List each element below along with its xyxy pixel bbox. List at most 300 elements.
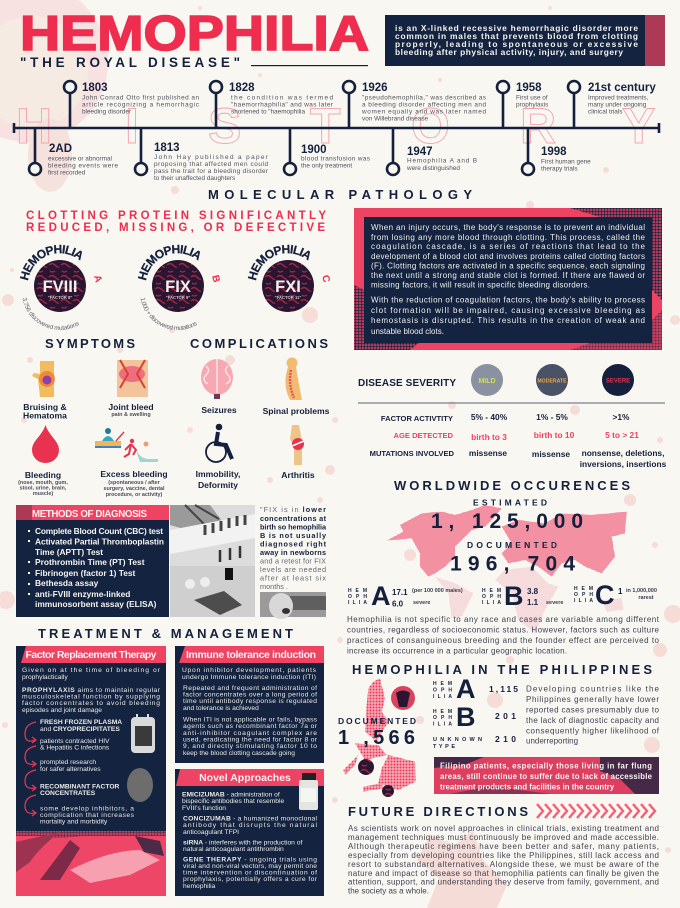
- callout: factor IX note: away in newborns: [260, 548, 326, 557]
- stat: PH hemophilia A: [433, 674, 518, 704]
- stat: hemophilia C: in 1,000,000: [626, 588, 657, 594]
- factor badge: hemophilia B: HEMOPHILIA: [138, 244, 200, 280]
- icon: wheelchair: [206, 424, 232, 462]
- event 1900: the only treatment: [301, 162, 352, 170]
- factor badge: hemophilia A: "FACTOR 8": [48, 295, 72, 300]
- stat: PH hemophilia A: A: [456, 674, 476, 704]
- event 1926: women equally and was later named: [361, 108, 486, 116]
- icon: vial: [299, 773, 318, 810]
- disease severity table: 5 to > 21: [605, 430, 639, 440]
- photo: baby: [260, 592, 326, 619]
- stat: hemophilia B: ILIA: [482, 600, 501, 606]
- text: future directions: [348, 824, 660, 896]
- panel: factor replacement therapy: and CRYOPRECIPITATES: [40, 726, 120, 733]
- event 1926: "pseudohemophilia," was described as: [362, 94, 486, 102]
- panel: novel approaches: Novel Approaches: [199, 772, 291, 784]
- panel: methods of diagnosis: Time (APTT) Test: [35, 547, 103, 557]
- panel: novel approaches: prophylaxis, potentially offers a cure for: [183, 876, 318, 883]
- stat: hemophilia A: ILIA: [348, 600, 367, 606]
- event 1926: a bleeding disorder affecting men and: [362, 102, 486, 108]
- stat: PH unknown type: [433, 734, 516, 750]
- stat: PH hemophilia B: 201: [495, 711, 516, 721]
- badge: severe: SEVERE: [606, 378, 630, 384]
- text: worldwide description: [347, 615, 660, 656]
- decorative chevrons: [537, 804, 655, 818]
- stat: hemophilia C: OPH: [574, 592, 593, 598]
- stat: documented: 196, 704: [450, 552, 575, 576]
- label: joint bleed: Joint bleed: [108, 402, 154, 412]
- panel: immune tolerance induction: Repeated and frequent administration of: [183, 685, 317, 692]
- history outline letters: S: [208, 98, 241, 154]
- event 1947: 1947: [407, 146, 433, 158]
- event 1926: 1926: [362, 82, 388, 94]
- panel: factor replacement therapy: for safer alternatives: [40, 766, 101, 773]
- stat: PH unknown type: UNKNOWN: [433, 737, 482, 743]
- panel: factor replacement therapy: RECOMBINANT FACTOR: [40, 784, 120, 790]
- label: immobility: Deformity: [198, 480, 238, 490]
- factor badge: hemophilia C: FXI: [275, 278, 301, 296]
- callout: factor IX note: levels are needed: [260, 565, 326, 574]
- intro box: bleeding after physical activity, injury, and surgery: [395, 47, 623, 57]
- stat: documented philippines: [338, 716, 416, 749]
- callout: filipino patients: Filipino patients, especially those living in far flung: [440, 762, 652, 770]
- photo: cryoprecipitate: [127, 768, 153, 802]
- stat: documented: DOCUMENTED: [467, 540, 557, 550]
- stat: PH hemophilia B: ILIA: [433, 722, 452, 728]
- label: bleeding: muscle): [33, 491, 53, 497]
- disease severity table: birth to 3: [471, 432, 507, 442]
- callout: factor IX note: "FIX is in lower: [260, 505, 326, 514]
- stat: hemophilia B: 3.8: [527, 587, 539, 596]
- stat: hemophilia B: HEM: [482, 588, 501, 594]
- disease severity table: nonsense, deletions,: [582, 448, 664, 458]
- event 1947: were distinguished: [406, 165, 460, 172]
- factor badge: hemophilia B: "FACTOR 9": [166, 295, 190, 300]
- factor badge: hemophilia A: [20, 244, 104, 330]
- text: worldwide description: Hemophilia is not specific to any race and cases are variable among different: [347, 615, 660, 624]
- event 21st century: [588, 82, 656, 116]
- icon: blood drop: [32, 425, 59, 463]
- disease severity table: AGE DETECTED: [394, 431, 454, 440]
- event 1828: shortened to "haemophilia: [231, 108, 305, 116]
- event 1926: von Willebrand disease: [362, 116, 429, 122]
- stat: hemophilia A: OPH: [348, 594, 367, 600]
- disease severity table: MUTATIONS INVOLVED: [370, 449, 455, 458]
- event 1803: John Conrad Otto first published an: [82, 94, 199, 102]
- panel: factor replacement therapy: CONCENTRATES: [40, 790, 96, 797]
- panel: factor replacement therapy: patients contracted HIV: [40, 738, 110, 745]
- stat: PH hemophilia A: OPH: [433, 688, 452, 694]
- label: spinal problems: Spinal problems: [263, 406, 330, 416]
- history outline letters: R: [520, 98, 556, 154]
- intro box: common in males that prevents blood from clotting: [395, 31, 638, 41]
- factor badge: hemophilia A: A: [91, 274, 104, 284]
- panel: novel approaches: FVIII's function: [182, 805, 226, 812]
- panel: novel approaches: siRNA - interferes with the production of: [183, 840, 302, 846]
- stat: PH hemophilia A: ILIA: [433, 694, 452, 700]
- label: joint bleed: pain & swelling: [111, 412, 151, 418]
- subtitle: "THE ROYAL DISEASE": [20, 55, 240, 70]
- panel: novel approaches: EMICIZUMAB - administration of: [182, 792, 280, 798]
- panel: immune tolerance induction: Immune tolerance induction: [186, 649, 316, 661]
- history outline letters: O: [411, 98, 450, 154]
- event 2AD: excessive or abnormal: [48, 156, 112, 162]
- event 1958: [516, 82, 548, 108]
- disease severity table: inversions, insertions: [580, 459, 667, 469]
- panel: novel approaches: CONCIZUMAB - a humanized monoclonal: [183, 816, 318, 822]
- map: philippines dotted: [343, 678, 416, 792]
- event 1813: to their unaffected daughters: [154, 175, 235, 182]
- panel: immune tolerance induction: anti-inhibitor coagulant complex are: [183, 730, 317, 737]
- panel: factor replacement therapy: factor concentrates to avoid bleeding: [22, 700, 160, 707]
- event 1813: [154, 142, 269, 182]
- event 1828: [229, 82, 334, 116]
- stat: hemophilia A: [348, 581, 463, 611]
- stat: PH hemophilia A: 1,115: [489, 684, 518, 694]
- history outline letters: Y: [622, 98, 655, 154]
- badge: moderate: MODERATE: [537, 378, 567, 384]
- heading: treatment and management: TREATMENT & MANAGEMENT: [38, 626, 293, 641]
- stat: hemophilia A: (per 100 000 males): [412, 588, 463, 594]
- stat: hemophilia A: 6.0: [392, 600, 404, 608]
- label: bleeding: (nose, mouth, gum,: [18, 480, 68, 486]
- label: bleeding: Bleeding: [25, 470, 61, 480]
- panel: immune tolerance induction: 9, and directly stimulating factor 10 to: [183, 743, 317, 750]
- panel: immune tolerance induction: used, eradicating the need for factor 8 or: [183, 736, 318, 744]
- stat: hemophilia B: [482, 581, 563, 611]
- callout: filipino patients: areas, still continue to suffer due to lack of accessible: [440, 772, 653, 781]
- factor badge: hemophilia C: "FACTOR 11": [275, 295, 301, 300]
- text: future directions: especially from developing countries like the Philippines, still lack access and: [348, 851, 659, 860]
- arrows: treatment flow: [25, 722, 36, 816]
- panel: coagulation explanation: unstable blood clots.: [371, 327, 444, 336]
- factor badge: hemophilia A: FVIII: [43, 278, 77, 296]
- icon: arthritis knee: [290, 425, 304, 465]
- disease severity table: missense: [469, 448, 507, 458]
- heading: molecular pathology: MOLECULAR PATHOLOGY: [208, 187, 472, 202]
- event 1813: pass the trait for a bleeding disorder: [154, 168, 269, 175]
- history outline letters: T: [310, 98, 341, 154]
- panel: methods of diagnosis: METHODS OF DIAGNOSIS: [32, 509, 148, 520]
- history outline letters: I: [125, 98, 139, 154]
- event 21st century: 21st century: [588, 82, 656, 94]
- timeline: [14, 81, 659, 182]
- text: philippines description: [526, 684, 660, 746]
- panel: factor replacement therapy: [16, 646, 166, 896]
- panel: coagulation explanation: clot formation will be impaired, causing excessive bleeding as: [371, 306, 645, 315]
- stat: PH hemophilia B: HEM: [433, 709, 452, 715]
- factor badge: hemophilia B: 1,000 + discovered mutations: [140, 298, 197, 330]
- panel: coagulation explanation: When an injury occurs, the body's response is to prevent an individual: [371, 223, 645, 232]
- intro box: [385, 15, 665, 66]
- heading: future directions: FUTURE DIRECTIONS: [348, 804, 528, 819]
- event 1947: [406, 146, 477, 172]
- panel: coagulation explanation: from losing any more blood through clotting. This process, called the: [371, 233, 646, 242]
- callout: filipino patients: treatment products and facilities in the country: [440, 782, 615, 792]
- panel: methods of diagnosis: [16, 505, 169, 617]
- callout: filipino patients: [434, 757, 659, 794]
- intro box: properly, leading to spontaneous or excessive: [395, 39, 638, 49]
- callout: factor IX note: concentrations at: [260, 514, 327, 523]
- factor badge: hemophilia C: HEMOPHILIA: [248, 244, 310, 280]
- text: philippines description: the lack of diagnostic capacity and: [526, 716, 659, 725]
- photo: laboratory: [170, 505, 255, 617]
- text: future directions: attention, support, and understanding they deserve from family, government, and: [348, 878, 659, 886]
- panel: immune tolerance induction: factor concentrates over a long period of: [183, 692, 317, 698]
- label: joint bleed: [108, 402, 154, 418]
- stat: hemophilia C: HEM: [574, 586, 593, 592]
- disease severity table: 1% - 5%: [536, 412, 568, 422]
- text: future directions: the society as a whole.: [348, 886, 429, 896]
- heading: hemophilia in the philippines: HEMOPHILIA IN THE PHILIPPINES: [352, 662, 652, 677]
- panel: novel approaches: natural anticoagulant antithrombin: [183, 846, 284, 853]
- panel: factor replacement therapy: Factor Replacement Therapy: [26, 649, 157, 661]
- event 2AD: first recorded: [48, 170, 86, 176]
- factor badge: hemophilia B: FIX: [165, 278, 191, 296]
- event 1813: John Hay published a paper: [154, 154, 269, 161]
- event 1998: 1998: [541, 146, 567, 158]
- heading: complications: COMPLICATIONS: [190, 336, 328, 351]
- panel: methods of diagnosis: immunosorbent assay (ELISA): [35, 599, 157, 609]
- event 1803: article recognizing a hemorrhagic: [82, 102, 200, 108]
- text: future directions: nature and impact of disease so that hemophilia patients can finally be given the: [348, 869, 660, 878]
- icon: brain: [201, 359, 233, 399]
- icon: bruised hand: [32, 361, 55, 397]
- stat: PH unknown type: 210: [495, 734, 516, 744]
- panel: methods of diagnosis: Fibrinogen (factor 1) Test: [35, 568, 136, 578]
- panel: methods of diagnosis: Bethesda assay: [35, 578, 99, 588]
- panel: novel approaches: GENE THERAPY - ongoing trials using: [183, 856, 317, 864]
- event 1813: proposing that affected men could: [154, 161, 268, 168]
- panel: factor replacement therapy: musculoskeletal function by supplying: [22, 694, 160, 700]
- event 1803: bleeding disorder: [82, 108, 132, 116]
- event 1998: First human gene: [541, 158, 591, 166]
- panel: immune tolerance induction: and tolerance is achieved: [183, 705, 259, 712]
- panel: coagulation explanation: With the reduction of coagulation factors, the body's ability to process: [371, 296, 645, 304]
- event 1803: [82, 82, 200, 116]
- event 1958: 1958: [516, 82, 542, 94]
- disease severity table: FACTOR ACTIVTITY: [381, 414, 453, 423]
- panel: factor replacement therapy: some develop inhibitors, a: [40, 806, 134, 812]
- text: worldwide description: increase its occurrence in a particular geographic location.: [347, 646, 567, 656]
- panel: methods of diagnosis: Activated Partial Thromboplastin: [35, 536, 164, 546]
- panel: factor replacement therapy: Given on at the time of bleeding or: [22, 667, 161, 674]
- label: bruising: Bruising &: [23, 402, 67, 412]
- event 1828: 1828: [229, 82, 255, 94]
- stat: PH hemophilia B: B: [456, 702, 476, 732]
- factor badge: hemophilia C: [248, 244, 332, 312]
- panel: novel approaches: time intervention or discontinuation of: [183, 870, 317, 876]
- callout: factor IX note: birth so hemophilia: [260, 522, 327, 532]
- panel: novel approaches: viral and non-viral vectors, may permit one: [183, 863, 317, 870]
- event 1958: prophylaxis: [516, 102, 548, 108]
- stat: hemophilia B: severe: [546, 600, 563, 606]
- text: worldwide description: practices of consanguineous breeding and the founder effect are perceived to: [347, 636, 660, 645]
- stat: hemophilia A: A: [371, 581, 390, 611]
- stat: hemophilia A: severe: [413, 600, 430, 606]
- disease severity table: 5% - 40%: [471, 412, 508, 422]
- badge: moderate: [536, 364, 568, 396]
- callout: factor IX note: after at least six: [260, 574, 326, 582]
- stat: hemophilia C: [574, 580, 657, 610]
- label: seizures: Seizures: [201, 405, 237, 415]
- event 1828: "haemorrhaphilia" and was later: [231, 102, 334, 108]
- panel: factor replacement therapy: complication that increases: [40, 812, 135, 819]
- factor badge: hemophilia B: B: [209, 274, 222, 284]
- event 2AD: bleeding events were: [48, 162, 118, 170]
- panel: coagulation explanation: hemostasis is disrupted. This results in the creation of weak and: [371, 316, 645, 325]
- panel: novel approaches: antibody that disrupts the natural: [183, 822, 318, 829]
- disease severity table: missense: [532, 449, 570, 459]
- heading: symptoms: SYMPTOMS: [45, 336, 135, 351]
- history outline letters: [16, 98, 655, 154]
- event 21st century: Improved treatments,: [588, 94, 649, 102]
- event 1803: 1803: [82, 82, 108, 94]
- icon: excess bleeding scenes: [95, 428, 158, 462]
- label: immobility: [196, 469, 240, 490]
- badge: mild: [471, 364, 503, 396]
- factor badge: hemophilia A: HEMOPHILIA: [20, 244, 82, 280]
- heading: clotting protein: CLOTTING PROTEIN SIGNIFICANTLY: [26, 210, 326, 222]
- panel: factor replacement therapy: mortality and morbidity: [40, 818, 108, 826]
- callout: factor IX note: and a retest for FIX: [260, 556, 326, 566]
- label: bleeding: [18, 470, 68, 497]
- event 1958: First use of: [516, 94, 548, 102]
- panel: factor replacement therapy: & Hepatitis C infections: [40, 744, 110, 752]
- panel: immune tolerance induction: When ITI is not applicable or fails, bypass: [183, 716, 318, 724]
- disease severity table: birth to 10: [534, 430, 575, 440]
- stat: estimated: 1, 125,000: [431, 510, 583, 533]
- label: disease severity: DISEASE SEVERITY: [358, 378, 456, 389]
- panel: novel approaches: hemophilia: [183, 883, 216, 890]
- panel: immune tolerance induction: [175, 646, 324, 763]
- icon: joint bleed: [117, 360, 148, 397]
- stat: PH hemophilia B: [433, 702, 516, 732]
- stat: PH hemophilia B: OPH: [433, 715, 452, 721]
- label: bleeding: stool, urine, brain,: [20, 486, 67, 492]
- icon: spine: [285, 358, 302, 400]
- stat: hemophilia C: C: [595, 580, 614, 610]
- panel: methods of diagnosis: anti-FVIII enzyme-linked: [35, 589, 130, 599]
- event 1828: the condition was termed: [231, 94, 333, 102]
- text: future directions: management techniques must continuously be improved and made accessible.: [348, 833, 659, 842]
- panel: factor replacement therapy: PROPHYLAXIS aims to maintain regular: [22, 687, 161, 694]
- disease severity table: >1%: [612, 412, 630, 422]
- heading: clotting protein: [26, 210, 326, 234]
- factor badge: hemophilia A: 3,756 discovered mutations: [22, 298, 79, 330]
- label: bruising: Hematoma: [23, 410, 67, 420]
- text: philippines description: Philippines generally have lower: [526, 695, 659, 704]
- stat: PH hemophilia A: HEM: [433, 681, 452, 687]
- label: excess bleeding: [100, 469, 168, 498]
- disease severity table: [358, 364, 667, 469]
- panel: factor replacement therapy: prompted research: [40, 759, 96, 766]
- label: immobility: Immobility,: [196, 469, 240, 479]
- label: bruising: [23, 402, 67, 420]
- panel: immune tolerance induction: keep the blood clotting cascade going: [183, 750, 295, 757]
- stat: PH unknown type: TYPE: [433, 744, 455, 750]
- stat: hemophilia A: 17.1: [392, 588, 408, 597]
- event 2AD: [48, 143, 118, 176]
- stat: hemophilia C: ILIA: [574, 598, 593, 604]
- panel: factor replacement therapy: prophylactically: [22, 674, 68, 681]
- panel: immune tolerance induction: time until antibody response is regulated: [183, 698, 317, 705]
- heading: clotting protein: REDUCED, MISSING, OR DEFECTIVE: [26, 222, 325, 234]
- text: philippines description: Developing countries like the: [526, 684, 660, 694]
- panel: novel approaches: bispecific antibodies that resemble: [182, 798, 285, 805]
- event 1947: Hemophilia A and B: [407, 158, 477, 164]
- text: worldwide description: countries, regardless of socioeconomic status. However, factors such as culture: [347, 626, 660, 634]
- callout: factor IX note: months .: [260, 582, 288, 591]
- label: excess bleeding: (spontaneous / after: [108, 480, 161, 486]
- panel: factor replacement therapy: episodes and joint damage: [22, 707, 102, 714]
- label: excess bleeding: Excess bleeding: [100, 469, 168, 479]
- event 21st century: clinical trials: [588, 108, 622, 116]
- panel: coagulation explanation: [354, 208, 662, 350]
- factor badge: hemophilia C: C: [319, 274, 332, 284]
- badge: mild: MILD: [478, 378, 496, 385]
- callout: factor IX note: diagnosed right: [260, 540, 327, 548]
- event 21st century: many under ongoing: [588, 102, 647, 108]
- panel: coagulation explanation: the next until a strong and stable clot is formed. If there are flawed or: [371, 271, 645, 280]
- label: excess bleeding: procedure, or activity): [106, 492, 163, 498]
- event 1900: 1900: [301, 144, 327, 156]
- panel: immune tolerance induction: Upon inhibitor development, patients: [182, 667, 317, 674]
- stat: estimated: ESTIMATED: [473, 498, 547, 508]
- event 1926: [361, 82, 486, 122]
- intro box: is an X-linked recessive hemorrhagic disorder more: [395, 23, 638, 33]
- stat: hemophilia B: 1.1: [527, 598, 539, 607]
- heading: worldwide occurences: WORLDWIDE OCCURENCES: [394, 478, 630, 493]
- event 1998: [541, 146, 591, 172]
- stat: hemophilia A: HEM: [348, 588, 367, 594]
- stat: hemophilia C: 1: [618, 587, 623, 596]
- stat: estimated: [431, 498, 583, 533]
- text: future directions: As scientists work on novel approaches in clinical trials, existing treatment and: [348, 824, 659, 833]
- panel: methods of diagnosis: Complete Blood Count (CBC) test: [35, 526, 163, 536]
- event 2AD: 2AD: [49, 143, 72, 155]
- stat: documented philippines: 1 ,566: [338, 727, 415, 749]
- panel: immune tolerance induction: undergo Immune tolerance induction (ITI): [182, 674, 316, 681]
- stat: documented: [450, 540, 575, 576]
- text: philippines description: consequently higher likelihood of: [526, 726, 660, 736]
- text: philippines description: reported cases presumably due to: [526, 706, 660, 714]
- event 1813: 1813: [154, 142, 180, 154]
- photo circles on map: [358, 686, 415, 797]
- label: arthritis: Arthritis: [281, 470, 315, 480]
- panel: coagulation explanation: missing factors, it will result in specific bleeding disorders.: [371, 280, 590, 290]
- panel: coagulation explanation: coagulation cascade, is a series of reactions that lead to the: [371, 242, 646, 251]
- label: excess bleeding: surgery, vaccine, dental: [103, 486, 165, 492]
- stat: hemophilia B: B: [504, 581, 524, 611]
- callout: factor IX note: [260, 505, 327, 591]
- map: world dotted: [387, 505, 627, 633]
- factor badge: hemophilia B: [138, 244, 222, 330]
- event 1900: blood transfusion was: [301, 156, 370, 162]
- panel: immune tolerance induction: agents such as recombinant factor 7a or: [183, 723, 318, 730]
- panel: methods of diagnosis: Prothrombin Time (PT) Test: [35, 557, 145, 567]
- title: HEMOPHILIA: [20, 7, 369, 61]
- stat: hemophilia B: OPH: [482, 594, 501, 600]
- panel: coagulation explanation: development of a blood clot and involves proteins called clotting factors: [371, 252, 645, 261]
- event 1998: therapy trials: [541, 166, 578, 172]
- stat: hemophilia C: rarest: [638, 595, 654, 601]
- panel: coagulation explanation: (F). Clotting factors are activated in a specific sequence, each signaling: [371, 262, 645, 270]
- icon: blood bag: [131, 714, 155, 753]
- panel: factor replacement therapy: FRESH FROZEN PLASMA: [40, 719, 122, 726]
- event 1900: [301, 144, 370, 170]
- text: philippines description: underreporting: [526, 736, 578, 746]
